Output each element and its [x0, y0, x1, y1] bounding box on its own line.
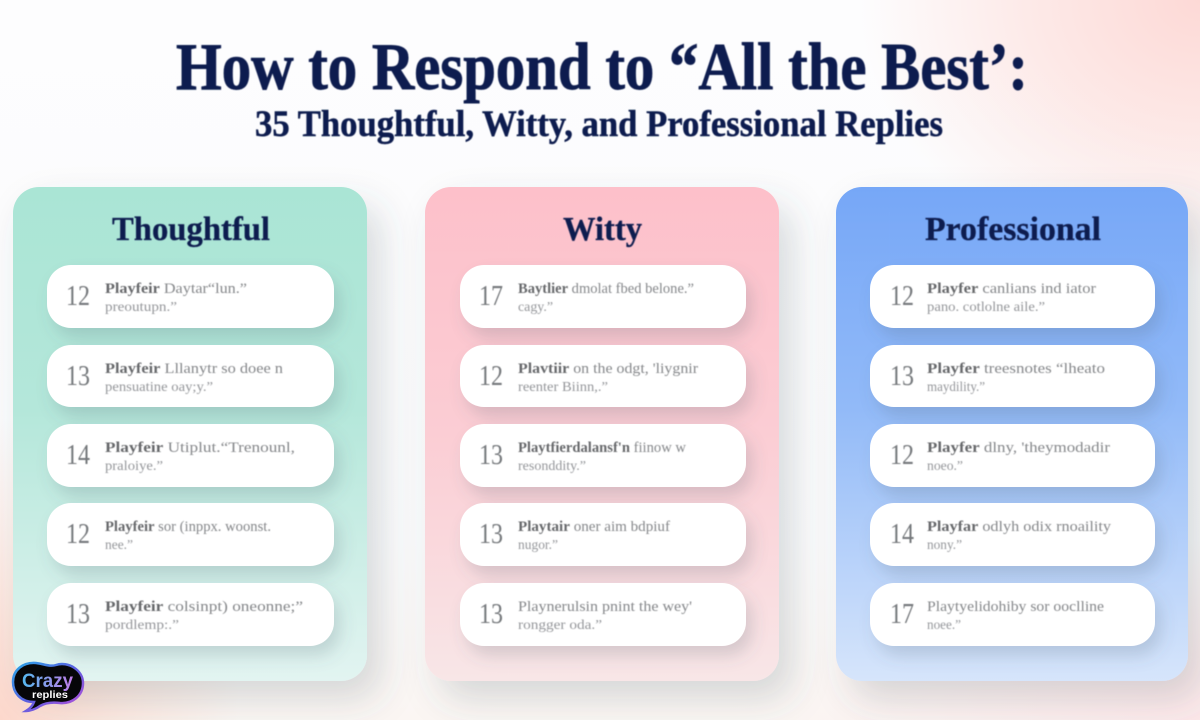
reply row 2: Playfer treesnotes “lheato: [927, 361, 1105, 377]
reply row 1: [460, 265, 746, 328]
reply row 5: Playnerulsin pnint the wey': [518, 599, 692, 615]
reply row 4: nony.”: [927, 538, 962, 553]
reply row 3: [870, 424, 1155, 487]
reply row 3: 14: [66, 440, 90, 471]
reply row 2: maydility.”: [927, 380, 985, 395]
reply row 1: preoutupn.”: [105, 300, 177, 315]
logo: crazy replies speech bubble: replies: [32, 689, 68, 701]
reply row 2: pensuatine oay;y.”: [105, 380, 213, 395]
heading: witty: Witty: [563, 211, 642, 248]
reply row 5: [870, 583, 1155, 646]
reply row 2: reenter Biinn,.”: [518, 380, 608, 395]
reply row 3: 12: [890, 440, 914, 471]
reply row 3: Playtfierdalansf'n fiinow w: [518, 440, 687, 456]
reply row 2: [47, 345, 334, 407]
reply row 2: 12: [479, 361, 503, 392]
reply row 4: [870, 503, 1155, 566]
title: How to Respond to “All the Best’:: [176, 30, 1028, 104]
reply row 1: Playfeir Daytar“lun.”: [105, 281, 247, 297]
reply row 4: Playtair oner aim bdpiuf: [518, 519, 670, 535]
reply row 2: Playfeir Lllanytr so doee n: [105, 361, 284, 377]
reply row 3: Playfer dlny, 'theymodadir: [927, 440, 1110, 456]
reply row 1: Playfer canlians ind iator: [927, 281, 1096, 297]
reply row 5: 13: [66, 599, 90, 630]
reply row 5: Playfeir colsinpt) oneonne;”: [105, 599, 303, 615]
reply row 4: nee.”: [105, 538, 133, 553]
reply row 3: praloiye.”: [105, 459, 163, 474]
reply row 4: Playfeir sor (inppx. woonst.: [105, 519, 271, 535]
reply row 2: 13: [66, 361, 90, 392]
reply row 1: [870, 265, 1155, 328]
reply row 2: 13: [890, 361, 914, 392]
reply row 5: pordlemp:.”: [105, 618, 179, 633]
heading: professional: Professional: [925, 211, 1101, 248]
reply row 4: 14: [890, 519, 914, 550]
panel: thoughtful: [13, 187, 367, 681]
panel: witty: [425, 187, 779, 681]
reply row 1: 12: [66, 281, 90, 312]
reply row 5: rongger oda.”: [518, 618, 602, 633]
reply row 3: noeo.”: [927, 459, 963, 474]
reply row 4: [47, 503, 334, 566]
reply row 3: Playfeir Utiplut.“Trenounl,: [105, 440, 295, 456]
reply row 5: [47, 583, 334, 646]
reply row 2: [870, 345, 1155, 407]
panel: professional: [836, 187, 1188, 681]
reply row 2: Plavtiir on the odgt, 'liygnir: [518, 361, 698, 377]
reply row 4: 13: [479, 519, 503, 550]
reply row 1: Baytlier dmolat fbed belone.”: [518, 281, 694, 297]
reply row 1: [47, 265, 334, 328]
heading: thoughtful: Thoughtful: [112, 211, 270, 248]
reply row 1: cagy.”: [518, 300, 553, 315]
reply row 4: 12: [66, 519, 90, 550]
reply row 2: [460, 345, 746, 407]
reply row 1: 12: [890, 281, 914, 312]
reply row 1: pano. cotlolne aile.”: [927, 300, 1045, 315]
reply row 3: [47, 424, 334, 487]
reply row 3: 13: [479, 440, 503, 471]
subtitle: 35 Thoughtful, Witty, and Professional Replies: [255, 104, 943, 145]
logo: crazy replies speech bubble: Crazy: [22, 671, 73, 692]
reply row 5: [460, 583, 746, 646]
reply row 4: nugor.”: [518, 538, 558, 553]
reply row 4: Playfar odlyh odix rnoaility: [927, 519, 1112, 535]
reply row 4: [460, 503, 746, 566]
reply row 5: noee.”: [927, 618, 961, 633]
reply row 1: 17: [479, 281, 503, 312]
logo: crazy replies speech bubble: [13, 663, 83, 711]
reply row 5: 17: [890, 599, 914, 630]
reply row 5: Playtyelidohiby sor ooclline: [927, 599, 1104, 615]
reply row 5: 13: [479, 599, 503, 630]
reply row 3: resonddity.”: [518, 459, 586, 474]
reply row 3: [460, 424, 746, 487]
